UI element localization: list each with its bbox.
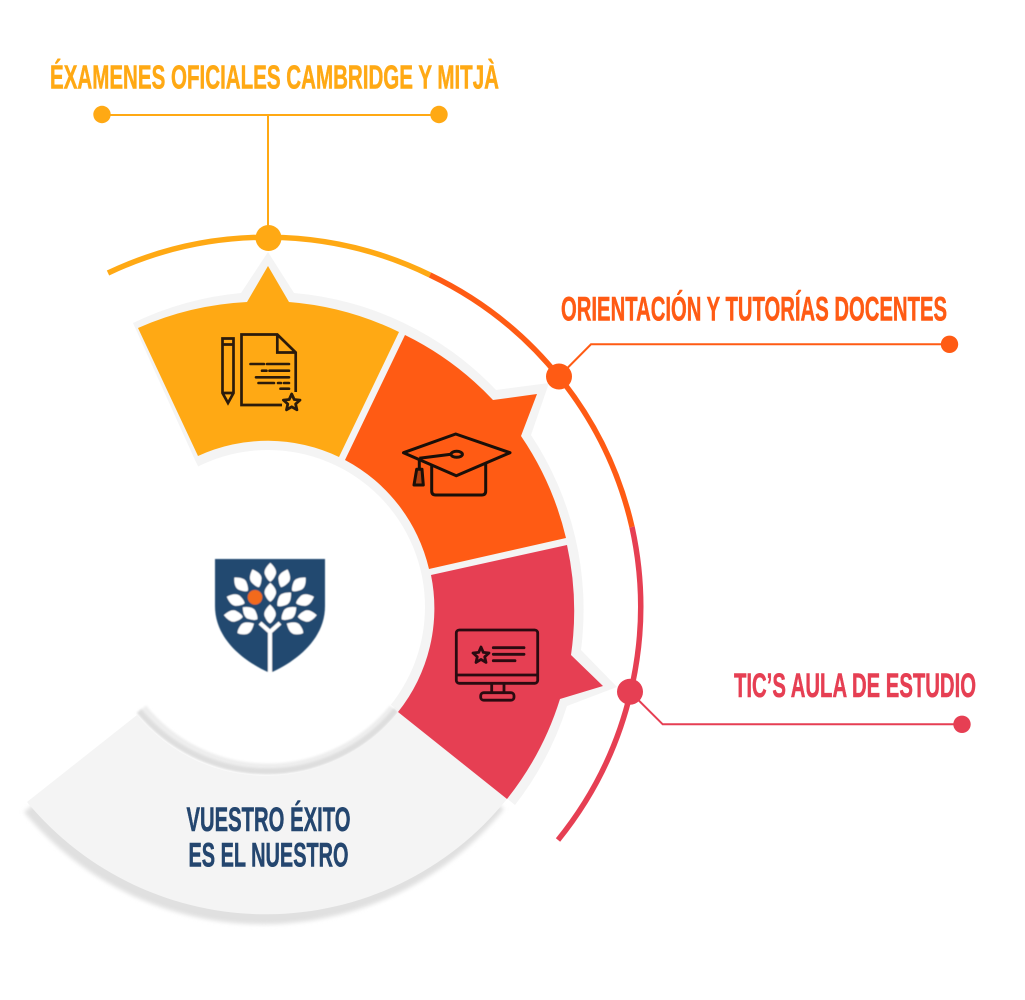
panel: gray band with message bbox=[24, 708, 507, 924]
callout: orange connector bbox=[546, 336, 958, 390]
callout: red connector bbox=[617, 679, 971, 733]
center white disc bbox=[111, 450, 425, 764]
icon: computer monitor bbox=[456, 630, 538, 700]
logo: shield with tree bbox=[215, 559, 325, 673]
icon: graduation cap bbox=[404, 434, 510, 495]
message text: VUESTRO ÉXITO bbox=[186, 801, 350, 839]
callout: yellow connector bbox=[93, 106, 448, 251]
outer ring backdrop bbox=[133, 252, 617, 805]
panel: yellow segment bbox=[138, 266, 399, 457]
icon: document and pencil bbox=[222, 334, 300, 410]
outer arc: orange part bbox=[430, 275, 632, 527]
message text: ES EL NUESTRO bbox=[188, 837, 348, 875]
panel: orange segment bbox=[345, 335, 566, 569]
heading: exams: ÉXAMENES OFICIALES CAMBRIDGE Y MITJÀ bbox=[50, 58, 499, 96]
panel: red segment bbox=[398, 545, 603, 799]
message text bbox=[186, 801, 350, 875]
outer arc: yellow part bbox=[108, 237, 430, 275]
outer arc: red part bbox=[558, 527, 641, 840]
